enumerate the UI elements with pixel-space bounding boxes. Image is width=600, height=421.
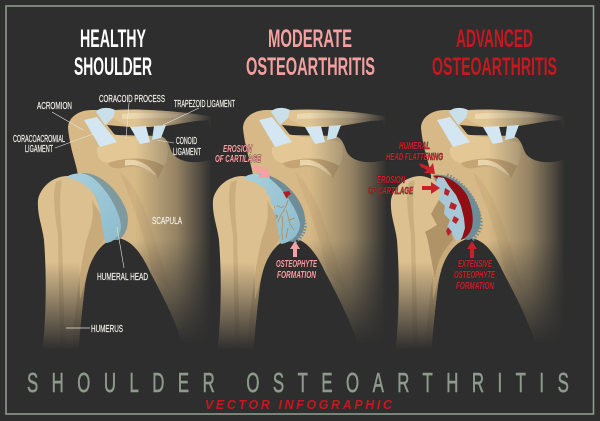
label: coracoid process: CORACOID PROCESS (99, 94, 165, 105)
arrow: flattening (419, 163, 435, 174)
label: coracoacromial ligament (13, 134, 93, 155)
title: healthy shoulder (74, 25, 152, 81)
humerus (38, 176, 104, 355)
label: osteophyte formation (moderate): FORMATION (277, 270, 317, 281)
label: extensive osteophyte formation: OSTEOPHYTE (454, 270, 495, 281)
label: osteophyte formation (moderate): OSTEOPHYTE (276, 259, 317, 270)
label: extensive osteophyte formation: FORMATION (456, 281, 494, 292)
label: erosion of cartilage (moderate): OF CARTILAGE (215, 154, 261, 165)
label: humeral head flattening (386, 141, 443, 163)
label: erosion of cartilage (advanced) (368, 175, 413, 197)
arrow: osteophyte (moderate) (290, 241, 300, 257)
panel: healthy shoulder anatomy (38, 108, 235, 355)
red exposed bone crescent (433, 176, 473, 240)
label: erosion of cartilage (advanced): EROSION (377, 175, 405, 186)
humerus (213, 176, 279, 355)
label: erosion of cartilage (moderate): EROSION (223, 144, 252, 155)
label: scapula: SCAPULA (152, 216, 182, 227)
label: humeral head (97, 227, 148, 283)
main footer title: SHOULDER OSTEOARTHRITIS (27, 367, 569, 398)
subtitle: VECTOR INFOGRAPHIC (205, 398, 393, 412)
label: trapezoid ligament: TRAPEZOID LIGAMENT (174, 99, 235, 110)
label: humerus (66, 324, 123, 335)
label: humerus: HUMERUS (91, 324, 123, 335)
label: coracoacromial ligament: CORACOACROMIAL (13, 134, 65, 145)
title: moderate osteoarthritis (246, 25, 375, 81)
title: moderate osteoarthritis: OSTEOARTHRITIS (246, 53, 375, 81)
label: erosion of cartilage (moderate) (215, 144, 261, 165)
label: extensive osteophyte formation: EXTENSIVE (458, 259, 492, 270)
label: humeral head flattening: HUMERAL (399, 141, 430, 152)
title: moderate osteoarthritis: MODERATE (268, 25, 352, 53)
label: conoid ligament (157, 136, 201, 158)
glenoid rim (82, 173, 128, 240)
label: coracoid process (99, 94, 165, 138)
arrow: erosion (moderate) (252, 164, 270, 178)
eroded cartilage with cracks (243, 174, 300, 244)
humerus (391, 176, 457, 355)
label: humeral head flattening: HEAD FLATTENING (386, 152, 443, 163)
panel: advanced shoulder anatomy (391, 108, 588, 355)
title: advanced osteoarthritis (432, 25, 557, 81)
healthy cartilage (66, 173, 121, 243)
title: healthy shoulder: HEALTHY (80, 25, 146, 53)
label: trapezoid ligament (163, 99, 235, 125)
label: humeral head: HUMERAL HEAD (97, 272, 148, 283)
humeral fracture shading (425, 196, 453, 278)
label: coracoacromial ligament: LIGAMENT (25, 144, 53, 155)
label: erosion of cartilage (advanced): OF CARTILAGE (368, 186, 413, 197)
cartilage fragments (435, 177, 465, 241)
label: extensive osteophyte formation (454, 259, 495, 292)
label: conoid ligament: LIGAMENT (173, 147, 201, 158)
rough glenoid rim (255, 174, 305, 242)
title: healthy shoulder: SHOULDER (74, 53, 152, 81)
label: osteophyte formation (moderate) (276, 259, 317, 281)
panel: moderate shoulder anatomy (213, 108, 410, 355)
arrow: osteophyte (advanced) (467, 241, 477, 258)
arrow: erosion (advanced) (422, 182, 440, 194)
title: advanced osteoarthritis: ADVANCED (456, 25, 533, 53)
label: conoid ligament: CONOID (176, 136, 197, 147)
label: acromion (37, 101, 83, 130)
label: acromion: ACROMION (37, 101, 72, 112)
spiked glenoid rim (433, 175, 481, 241)
